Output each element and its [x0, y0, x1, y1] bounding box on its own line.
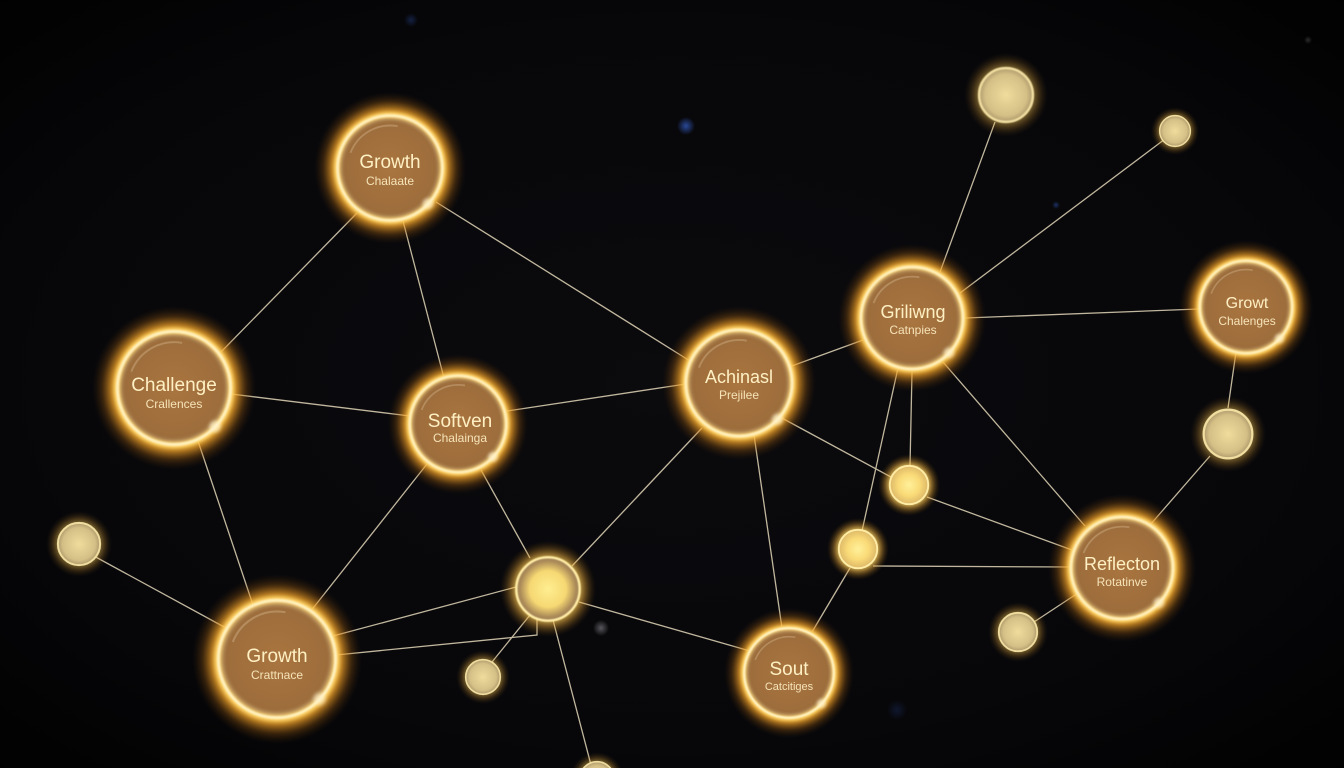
small node: top right small	[1151, 107, 1199, 155]
small node: right	[1190, 396, 1266, 472]
small node: top right large	[964, 53, 1048, 137]
node: Achinasl: Achinasl	[705, 367, 773, 387]
node: Growth bottom: Crattnace	[251, 668, 303, 682]
node: Challenge: Crallences	[146, 397, 202, 411]
node: Sout	[724, 608, 854, 738]
small node: middle right lower	[827, 518, 889, 580]
node: Growt right: Chalenges	[1218, 314, 1276, 328]
node: Challenge: Challenge	[131, 375, 217, 396]
node: Growth bottom: Growth	[246, 646, 308, 667]
node: Growt right: Growt	[1226, 295, 1269, 312]
node: Reflecton: Rotatinve	[1097, 575, 1148, 589]
node: Softven: Chalainga	[433, 431, 487, 445]
node: Growth top	[314, 92, 466, 244]
small node: lower right	[988, 602, 1048, 662]
node: Griliwing: Griliwng	[880, 302, 946, 322]
small node: bottom centre left	[456, 650, 510, 704]
node: Growt right	[1179, 240, 1313, 374]
background stars	[404, 13, 1312, 720]
node: Softven: Softven	[428, 411, 492, 432]
node: Softven	[388, 354, 528, 494]
node: Challenge	[92, 306, 256, 470]
node: Reflecton: Reflecton	[1084, 554, 1160, 574]
connection lines	[92, 122, 1236, 765]
node: Growth top: Growth	[359, 152, 421, 173]
node: Achinasl: Prejilee	[719, 388, 759, 402]
small node: centre bottom	[500, 541, 596, 637]
node: Griliwing	[838, 244, 986, 392]
node: Growth bottom	[192, 574, 362, 744]
node: Growth top: Chalaate	[366, 174, 414, 188]
small node: middle right upper	[878, 454, 940, 516]
node: Griliwing: Catnpies	[889, 323, 937, 337]
node: Achinasl	[662, 306, 816, 460]
node: Sout: Sout	[769, 659, 809, 680]
small node: far left	[46, 511, 112, 577]
small node: bottom edge	[570, 752, 624, 768]
node: Sout: Catcitiges	[765, 681, 814, 693]
node: Reflecton	[1048, 494, 1196, 642]
